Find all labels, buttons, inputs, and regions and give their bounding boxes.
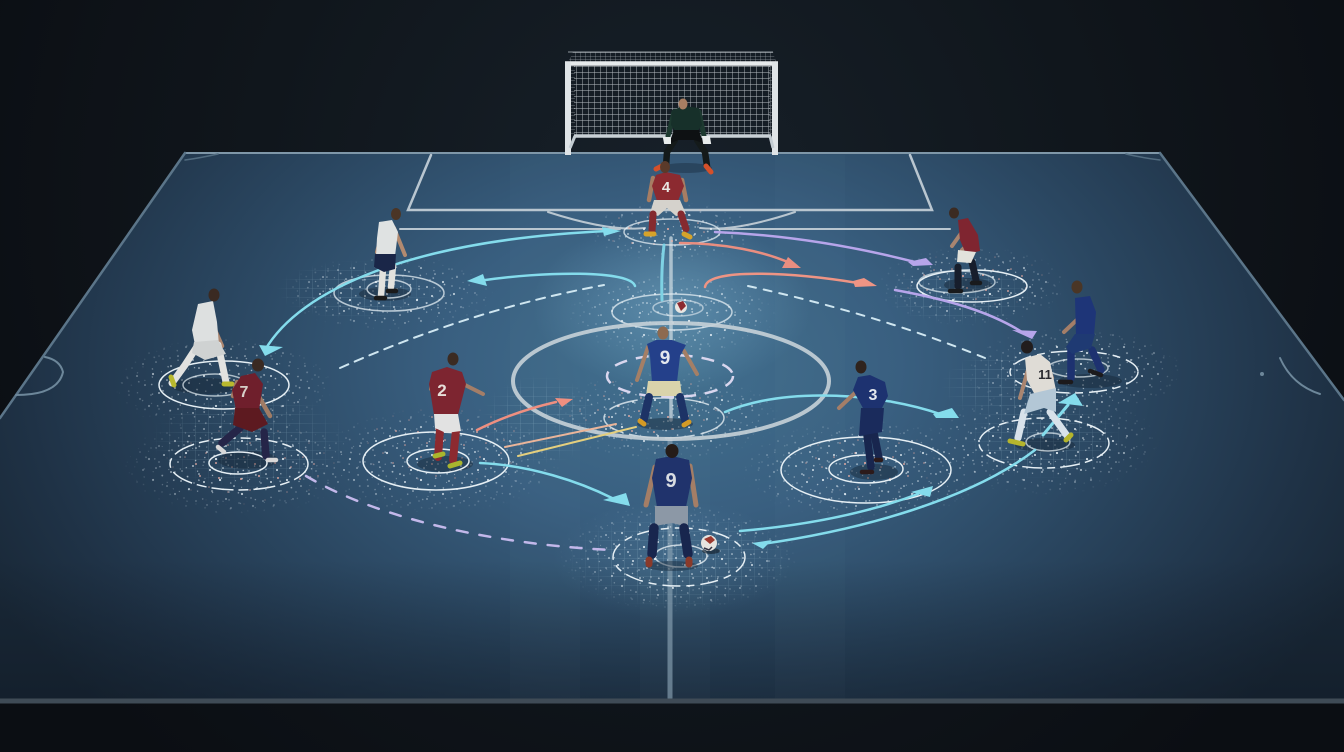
player: blue 9 bottom: 9 <box>665 470 677 492</box>
player: white top left <box>374 208 405 298</box>
arrow: dashed right diagonal <box>748 286 985 358</box>
player: red 4 <box>646 161 690 237</box>
arrow: cyan to bottom player <box>480 463 630 506</box>
player: white 11: 11 <box>1038 367 1052 382</box>
arrow: dashed lavender bottom <box>306 476 612 550</box>
arrow: salmon top short <box>680 243 801 268</box>
arrow: cyan return <box>467 274 635 286</box>
player: blue 3 <box>839 360 888 472</box>
player: blue right <box>1060 280 1101 382</box>
arrow: cyan vertical <box>662 245 664 300</box>
player: blue 9 bottom <box>646 444 698 571</box>
arrow: dashed left diagonal <box>340 285 604 368</box>
player: red 7: 7 <box>240 384 249 401</box>
panel: pitch surface <box>0 153 1344 700</box>
arrow: cyan through centre right <box>725 395 959 418</box>
player: blue 3: 3 <box>869 387 878 404</box>
player: red 2: 2 <box>437 381 447 400</box>
player: red 4: 4 <box>662 179 671 196</box>
tactical arrows <box>259 227 1083 550</box>
player: red top right <box>949 208 980 291</box>
arrow: salmon midfield <box>477 398 573 430</box>
player: white left <box>171 288 232 385</box>
player zone rings <box>159 219 1138 586</box>
particle and grid fields <box>119 205 1178 609</box>
player: blue 9 centre: 9 <box>660 348 670 369</box>
pitch markings <box>0 153 1344 701</box>
goal <box>565 52 778 155</box>
arrow: salmon top long <box>705 274 877 287</box>
arrow: cyan long return <box>752 450 1035 549</box>
icon: ball bottom <box>701 535 720 554</box>
arrow: pale pass lines <box>505 424 636 456</box>
arrow: lavender right <box>895 290 1037 339</box>
arrow: cyan up right <box>1043 393 1083 435</box>
player shadows <box>171 278 1122 480</box>
arrow: lavender top <box>715 232 933 266</box>
centre circle <box>513 323 829 439</box>
player: blue 9 centre <box>637 326 697 425</box>
arrow: cyan arc to left winger <box>259 227 621 356</box>
player: white 11 <box>1010 340 1071 444</box>
player: goalkeeper <box>656 98 712 173</box>
player: red 7 <box>218 358 276 460</box>
player: red 2 <box>429 352 483 466</box>
icon: ball top <box>675 301 687 313</box>
arrow: cyan lower right <box>740 486 933 531</box>
